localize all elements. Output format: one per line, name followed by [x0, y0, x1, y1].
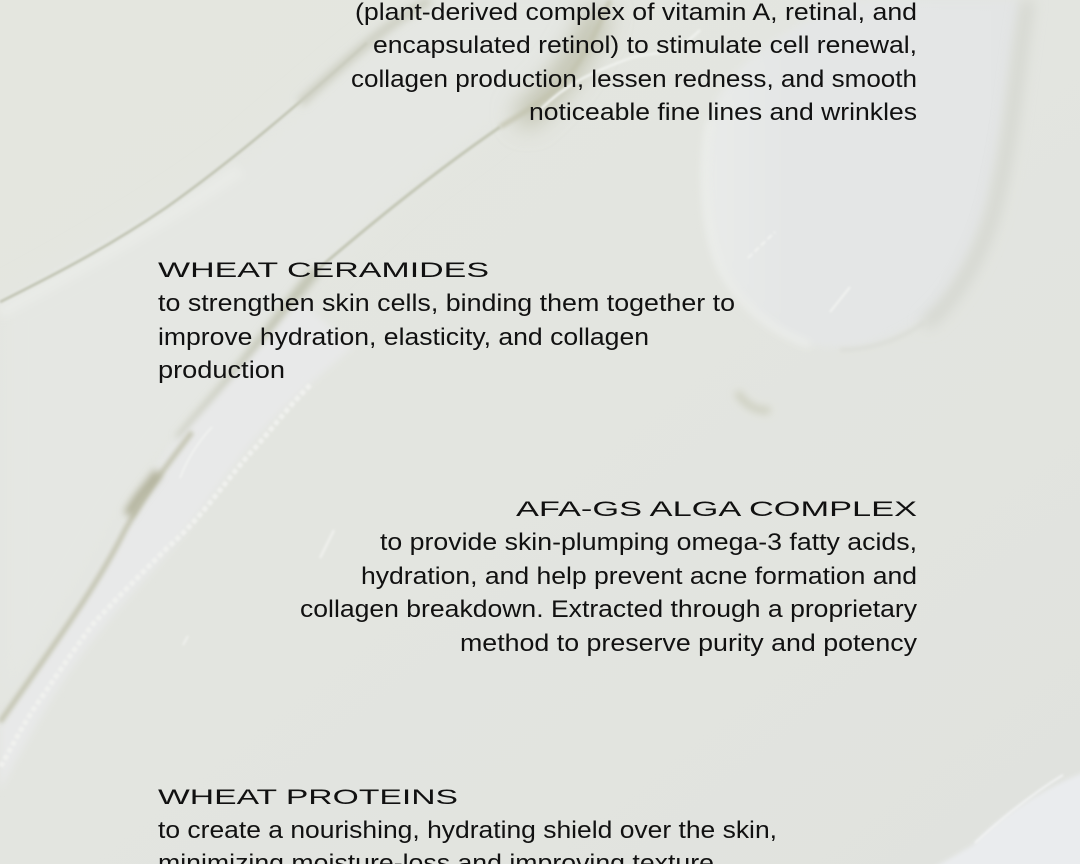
description: AFA-GS alga complex: [300, 529, 918, 657]
heading: wheat proteins: WHEAT PROTEINS: [158, 786, 458, 809]
text block: wheat proteins: [158, 786, 777, 864]
description: wheat ceramides: improve hydration, elasticity, and collagen: [158, 324, 649, 351]
white band: [0, 300, 353, 790]
heading: wheat ceramides: WHEAT CERAMIDES: [158, 259, 489, 282]
heading: AFA-GS alga complex: AFA-GS ALGA COMPLEX: [516, 498, 917, 521]
description: AFA-GS alga complex: collagen breakdown. Extracted through a proprietary: [300, 596, 918, 623]
text block: AFA-GS alga complex: [300, 498, 918, 657]
description: wheat proteins: to create a nourishing, hydrating shield over the skin,: [158, 817, 777, 844]
description: AFA-GS alga complex: to provide skin-plumping omega-3 fatty acids,: [380, 529, 917, 556]
description: AFA-GS alga complex: hydration, and help prevent acne formation and: [361, 563, 917, 590]
text block: retinol complex description: encapsulated retinol) to stimulate cell renewal,: [373, 32, 917, 59]
text block: retinol complex description: collagen production, lessen redness, and smooth: [351, 66, 917, 93]
text block: retinol complex description: [351, 0, 917, 126]
description: wheat proteins: [158, 817, 777, 864]
description: wheat ceramides: to strengthen skin cells, binding them together to: [158, 290, 735, 317]
description: AFA-GS alga complex: method to preserve purity and potency: [460, 630, 918, 657]
description: wheat ceramides: production: [158, 357, 285, 384]
text block: wheat ceramides: [158, 259, 735, 384]
text block: retinol complex description: noticeable fine lines and wrinkles: [529, 99, 917, 126]
description: wheat ceramides: [158, 290, 735, 384]
